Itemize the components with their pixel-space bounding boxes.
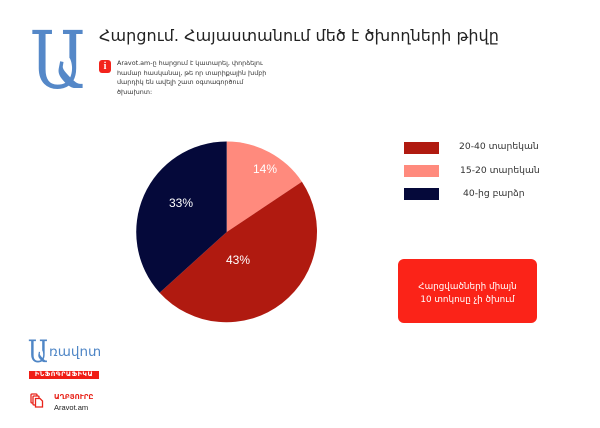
callout text: Հարցվածների միայն — [418, 282, 517, 292]
legend label: 20-40: 20-40 տարեկան — [459, 141, 539, 152]
logo letter: Ա — [28, 334, 48, 370]
intro text: Aravot.am-ը հարցում է կատարել, փորձելու — [117, 59, 263, 67]
callout text: 10 տոկոսը չի ծխում — [420, 295, 515, 305]
logo word: ռավոտ — [49, 344, 101, 360]
callout text — [418, 282, 517, 305]
swatch: 20-40 — [404, 142, 439, 154]
slice: 20-40 — [160, 182, 317, 322]
swatch: 15-20 — [404, 165, 439, 177]
icon: info — [99, 60, 111, 73]
slice: 15-20 — [227, 142, 302, 232]
pie chart — [136, 142, 317, 322]
title: Հարցում. Հայաստանում մեծ է ծխողների թիվը — [99, 26, 499, 45]
icon: source pages — [30, 393, 44, 408]
source name: Aravot.am — [54, 403, 88, 412]
legend — [404, 141, 540, 200]
intro text — [117, 59, 266, 96]
label: 43%: 43% — [226, 253, 250, 267]
legend label: 15-20: 15-20 տարեկան — [460, 165, 540, 176]
big logo letter: Ա — [30, 14, 86, 107]
icon: info: i — [104, 61, 106, 72]
intro text: ծխախոտ: — [117, 88, 152, 96]
label: 33%: 33% — [169, 196, 193, 210]
callout — [398, 259, 537, 323]
label: 14%: 14% — [253, 162, 277, 176]
infographic banner: ԻՆՖՈԳՐԱՖԻԿԱ — [35, 371, 93, 378]
intro text: մարդիկ են ավելի շատ օգտագործում — [117, 78, 243, 86]
source label: ԱՂԲՅՈՒՐԸ — [54, 393, 93, 401]
intro text: համար հասկանալ, թե որ տարիքային խմբի — [117, 69, 266, 77]
slice: 40+ — [136, 142, 227, 293]
legend label: 40+: 40-ից բարձր — [463, 188, 525, 199]
swatch: 40+ — [404, 188, 439, 200]
logo wordmark — [28, 334, 101, 370]
